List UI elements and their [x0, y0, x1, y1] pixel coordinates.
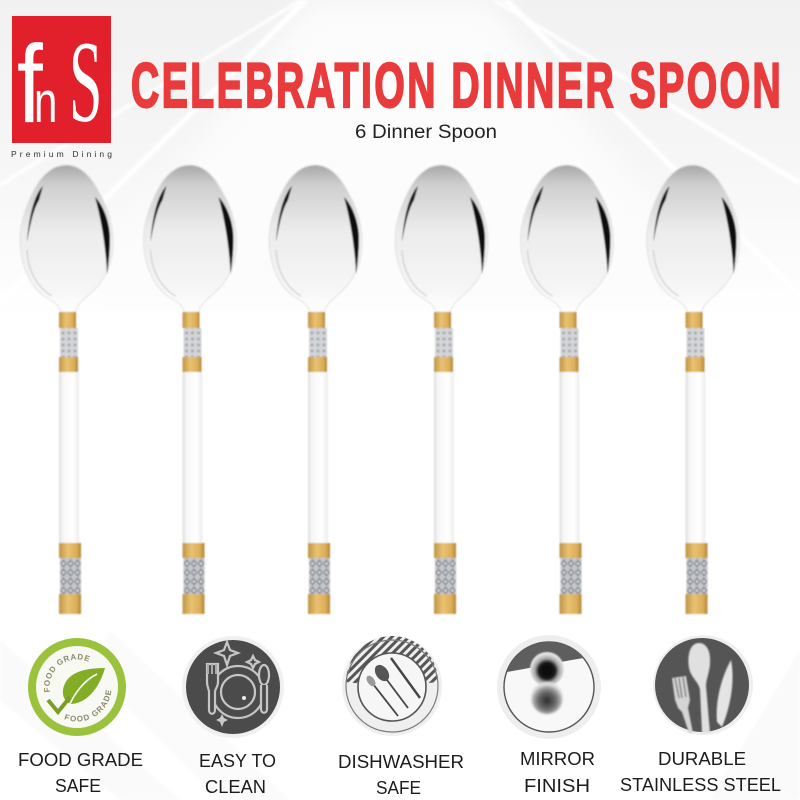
logo: fnS Premium Dining: [11, 16, 112, 159]
spoon 4: [395, 165, 488, 614]
spoons: [20, 165, 740, 614]
logo letters: n: [34, 69, 57, 135]
icon: fork, spoon and knife: [653, 635, 753, 735]
label: DURABLE: [658, 748, 746, 769]
feature: durable stainless steel: [620, 635, 781, 795]
label: CLEAN: [205, 776, 266, 797]
feature: dishwasher safe: [338, 636, 469, 798]
feature: easy to clean: [182, 636, 284, 797]
label: DISHWASHER: [338, 751, 464, 772]
logo tagline: Premium Dining: [11, 149, 112, 159]
spoon 6: [646, 165, 740, 614]
subtitle: 6 Dinner Spoon: [355, 122, 497, 143]
spoon 3: [269, 165, 362, 614]
label: STAINLESS STEEL: [620, 774, 781, 795]
label: EASY TO: [199, 750, 276, 771]
feature: mirror finish: [497, 635, 601, 796]
label: MIRROR: [520, 748, 595, 769]
logo letters: S: [69, 18, 102, 147]
label: SAFE: [55, 775, 101, 796]
icon: plate with cutlery: [342, 636, 442, 736]
icon: plate and sparkle: [182, 636, 284, 738]
label: FOOD GRADE: [18, 749, 143, 770]
icon: food grade badge: FOOD GRADE: [64, 690, 112, 722]
feature: food grade safe: [18, 638, 143, 796]
logo red panel: [12, 16, 111, 143]
spoon 1: [20, 165, 113, 614]
label: SAFE: [376, 777, 421, 798]
spoon 2: [144, 165, 236, 614]
logo letters: [17, 18, 102, 147]
label: FINISH: [524, 775, 590, 796]
icon: food grade badge: FOOD GRADE: [44, 654, 90, 692]
logo letters: f: [17, 22, 43, 146]
title: CELEBRATION DINNER SPOON: [131, 52, 781, 121]
icon: food grade badge: [28, 638, 126, 736]
spoon 5: [520, 165, 614, 614]
icon: mirror balls: [497, 635, 601, 739]
